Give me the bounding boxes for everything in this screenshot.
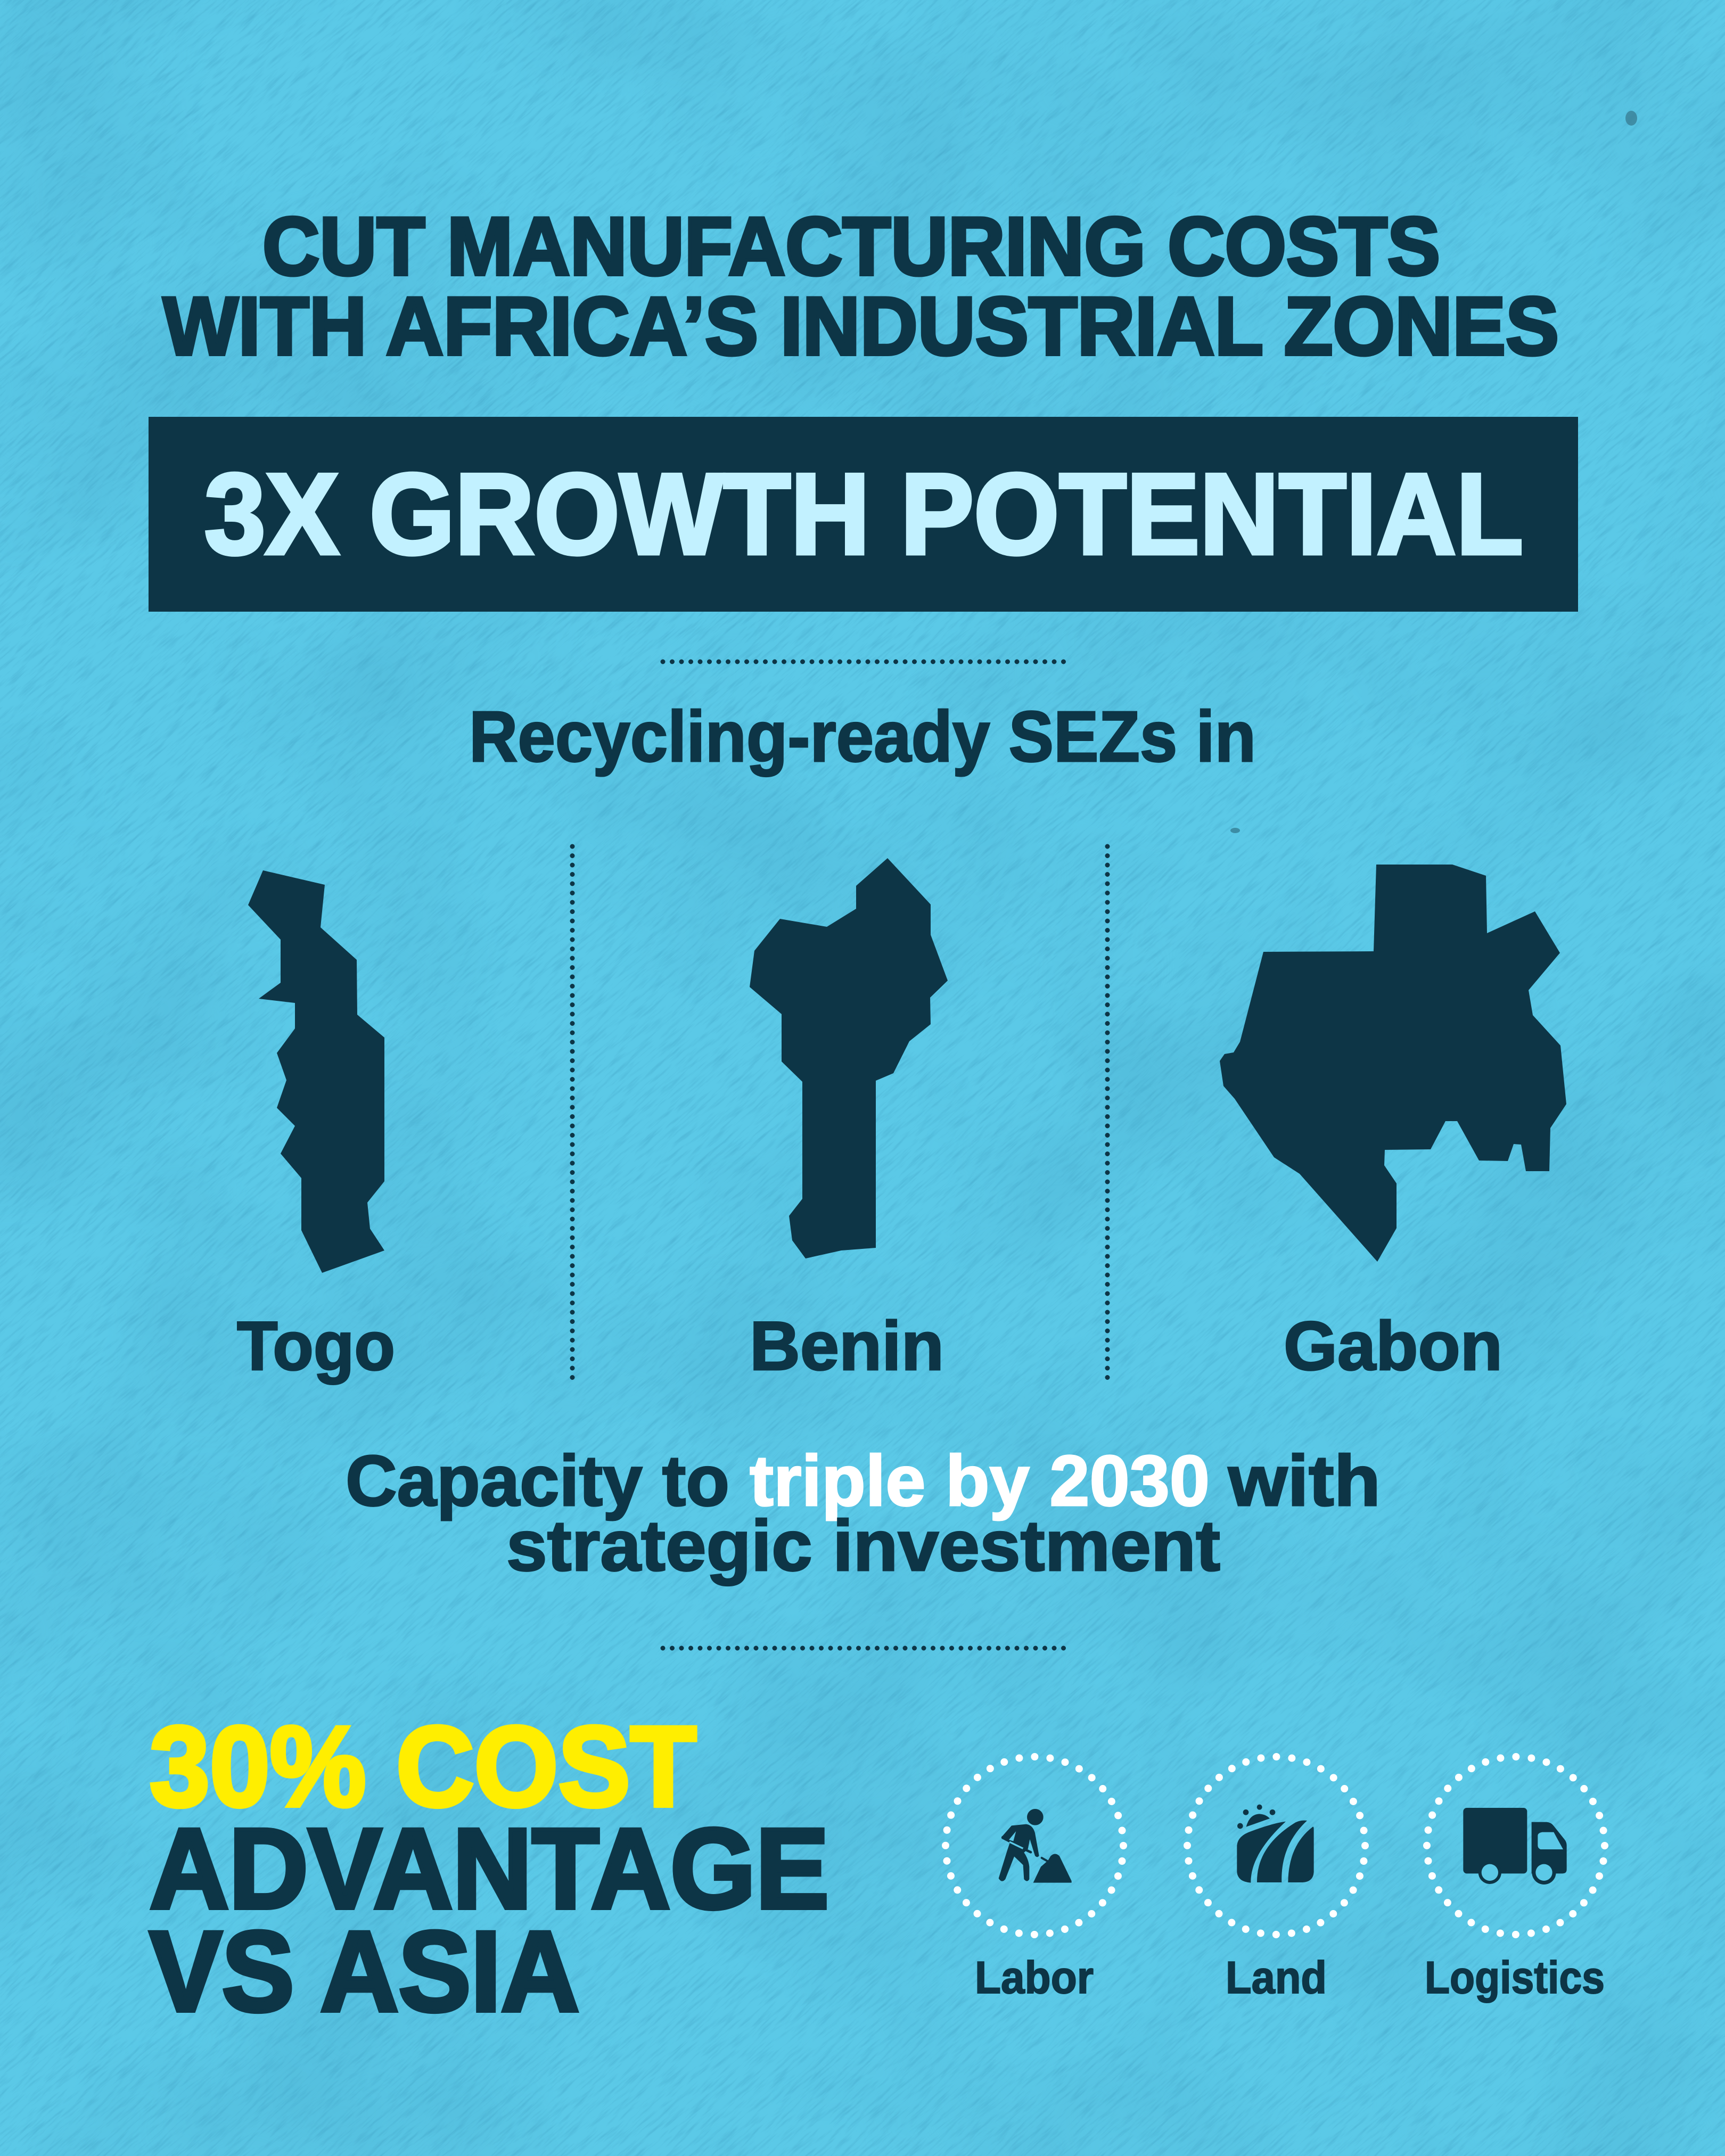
subheading: Recycling-ready SEZs in — [469, 696, 1256, 777]
label: Togo: Togo — [237, 1307, 395, 1385]
label: Labor: Labor — [975, 1953, 1094, 2003]
statement: capacity to triple by 2030: triple by 2030 — [750, 1441, 1210, 1521]
icon: worker with shovel — [999, 1809, 1072, 1883]
map: Togo — [248, 870, 384, 1273]
label: Land: Land — [1226, 1953, 1327, 2003]
statement: capacity to triple by 2030: strategic investment — [506, 1505, 1220, 1586]
headline: 30% cost advantage vs Asia: VS ASIA — [150, 1908, 579, 2035]
panel: Logistics — [1425, 1757, 1605, 2003]
title — [163, 200, 1559, 372]
panel: Togo — [237, 870, 395, 1385]
panel: Gabon — [1220, 865, 1566, 1385]
title: CUT MANUFACTURING COSTS — [262, 200, 1440, 292]
label: Gabon: Gabon — [1284, 1307, 1502, 1385]
panel: Benin — [750, 858, 948, 1385]
label: Benin: Benin — [750, 1307, 944, 1385]
banner: 3x growth potential — [149, 417, 1578, 612]
title: WITH AFRICA’S INDUSTRIAL ZONES — [163, 280, 1559, 372]
headline: 30% cost advantage vs Asia: ADVANTAGE — [150, 1805, 829, 1932]
panel: Land — [1187, 1757, 1365, 2003]
icon: fields with sun — [1237, 1805, 1314, 1883]
icon: delivery truck — [1463, 1808, 1567, 1885]
statement: capacity to triple by 2030: Capacity to — [346, 1441, 729, 1521]
banner: 3x growth potential: 3X GROWTH POTENTIAL — [204, 449, 1523, 578]
headline: 30% cost advantage vs Asia — [150, 1703, 829, 2035]
headline: 30% cost advantage vs Asia: 30% COST — [150, 1703, 696, 1830]
map: Benin — [750, 858, 948, 1258]
label: Logistics: Logistics — [1425, 1953, 1605, 2003]
map: Gabon — [1220, 865, 1566, 1262]
statement: capacity to triple by 2030: with — [1228, 1441, 1381, 1521]
panel: Labor — [946, 1757, 1123, 2003]
statement: capacity to triple by 2030 — [346, 1441, 1381, 1586]
